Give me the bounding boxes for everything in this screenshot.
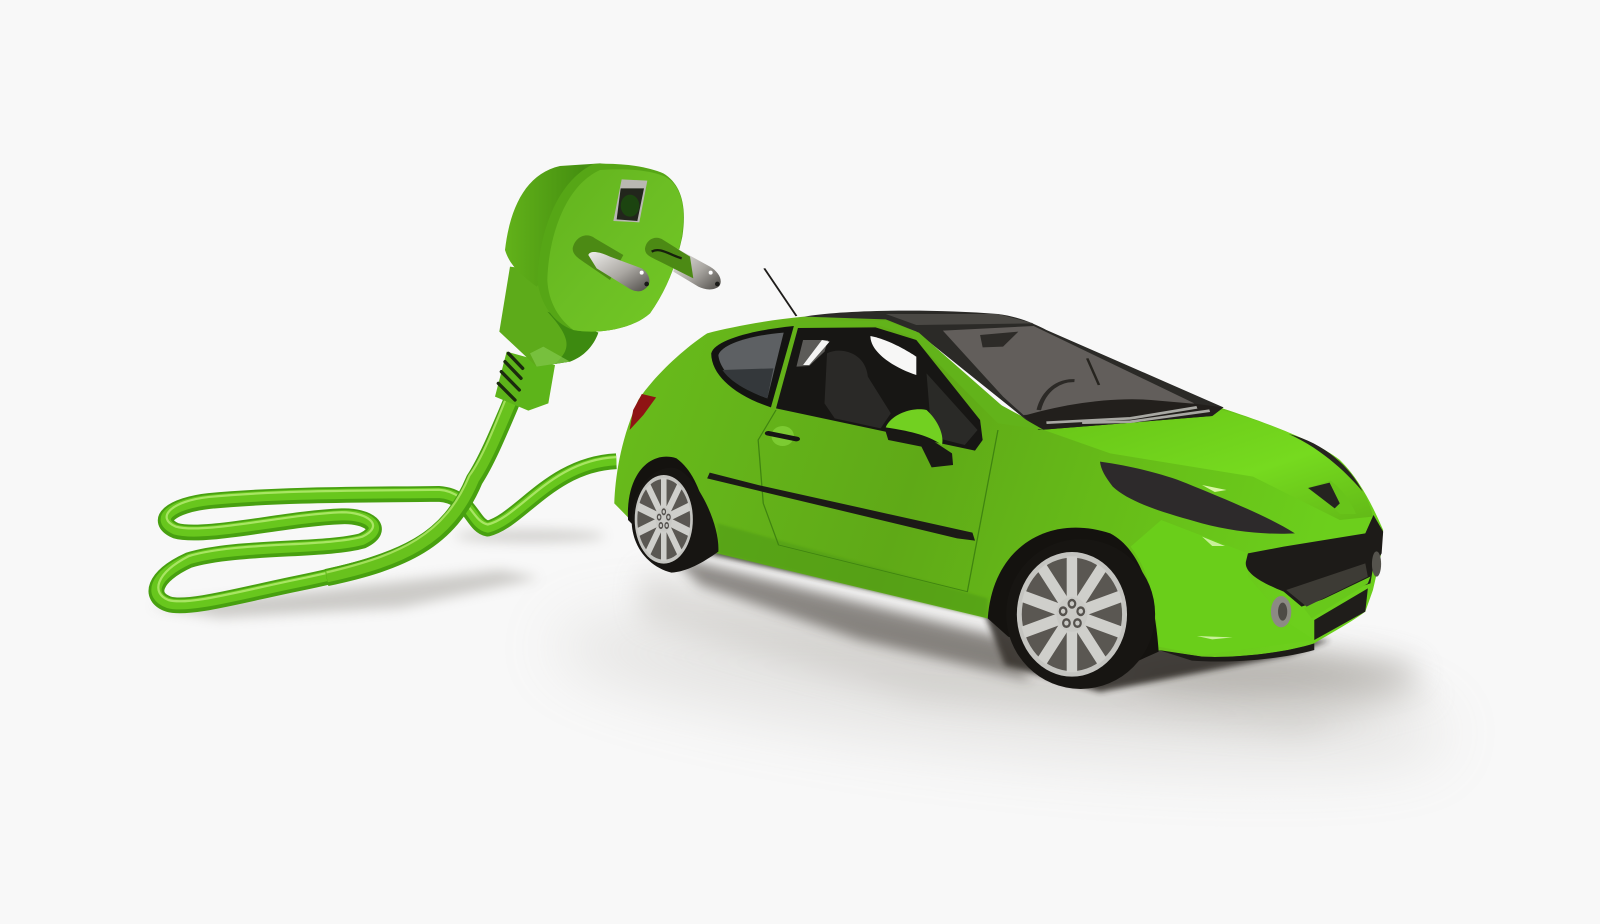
front vent (1307, 481, 1356, 514)
steering wheel (1039, 381, 1074, 410)
plug face rim (537, 164, 684, 332)
bumper sheen (1197, 537, 1233, 639)
plug pin right (645, 238, 721, 289)
headlight (1100, 462, 1295, 534)
windshield (943, 326, 1194, 415)
plug pin left (573, 235, 649, 291)
front bumper highlight (1131, 520, 1314, 655)
door seams (758, 410, 998, 592)
black bumper grille (1246, 515, 1383, 640)
car contact shadow (670, 530, 1330, 692)
car body (614, 317, 1383, 657)
dashboard (1023, 399, 1223, 430)
plug back shell (505, 163, 647, 287)
antenna (764, 268, 796, 316)
soft ground shadow (546, 570, 1454, 797)
plug (495, 163, 721, 411)
green roof rail (796, 321, 1044, 430)
door window (776, 327, 983, 451)
lower sill shading (717, 523, 988, 618)
rear wheel rim (635, 475, 693, 564)
door handle (768, 426, 796, 446)
roof (804, 311, 1223, 430)
wipers (1046, 407, 1210, 423)
side protection strip (707, 473, 975, 541)
plug socket (613, 179, 647, 222)
cable shadow (150, 530, 605, 618)
windshield pillar (1087, 358, 1099, 385)
hood edge trim (1289, 434, 1363, 492)
charging cable (156, 393, 616, 605)
hood sheen (1202, 485, 1227, 492)
car (614, 268, 1383, 689)
rear light (630, 394, 656, 430)
rear tyre (632, 468, 718, 573)
mirror (885, 409, 953, 467)
plug strain relief and neck (495, 267, 598, 411)
rear wheel arch (628, 457, 710, 553)
front wheel arch (988, 528, 1159, 673)
plug front face (547, 169, 683, 332)
front wheel rim (1017, 552, 1127, 677)
interior mirror (980, 332, 1018, 347)
fog lamps (1271, 551, 1381, 627)
hood (1044, 410, 1373, 520)
underbody shadow (1159, 643, 1314, 662)
rear quarter window (711, 326, 794, 407)
front tyre (1006, 539, 1155, 689)
roof sheen (886, 314, 1034, 325)
